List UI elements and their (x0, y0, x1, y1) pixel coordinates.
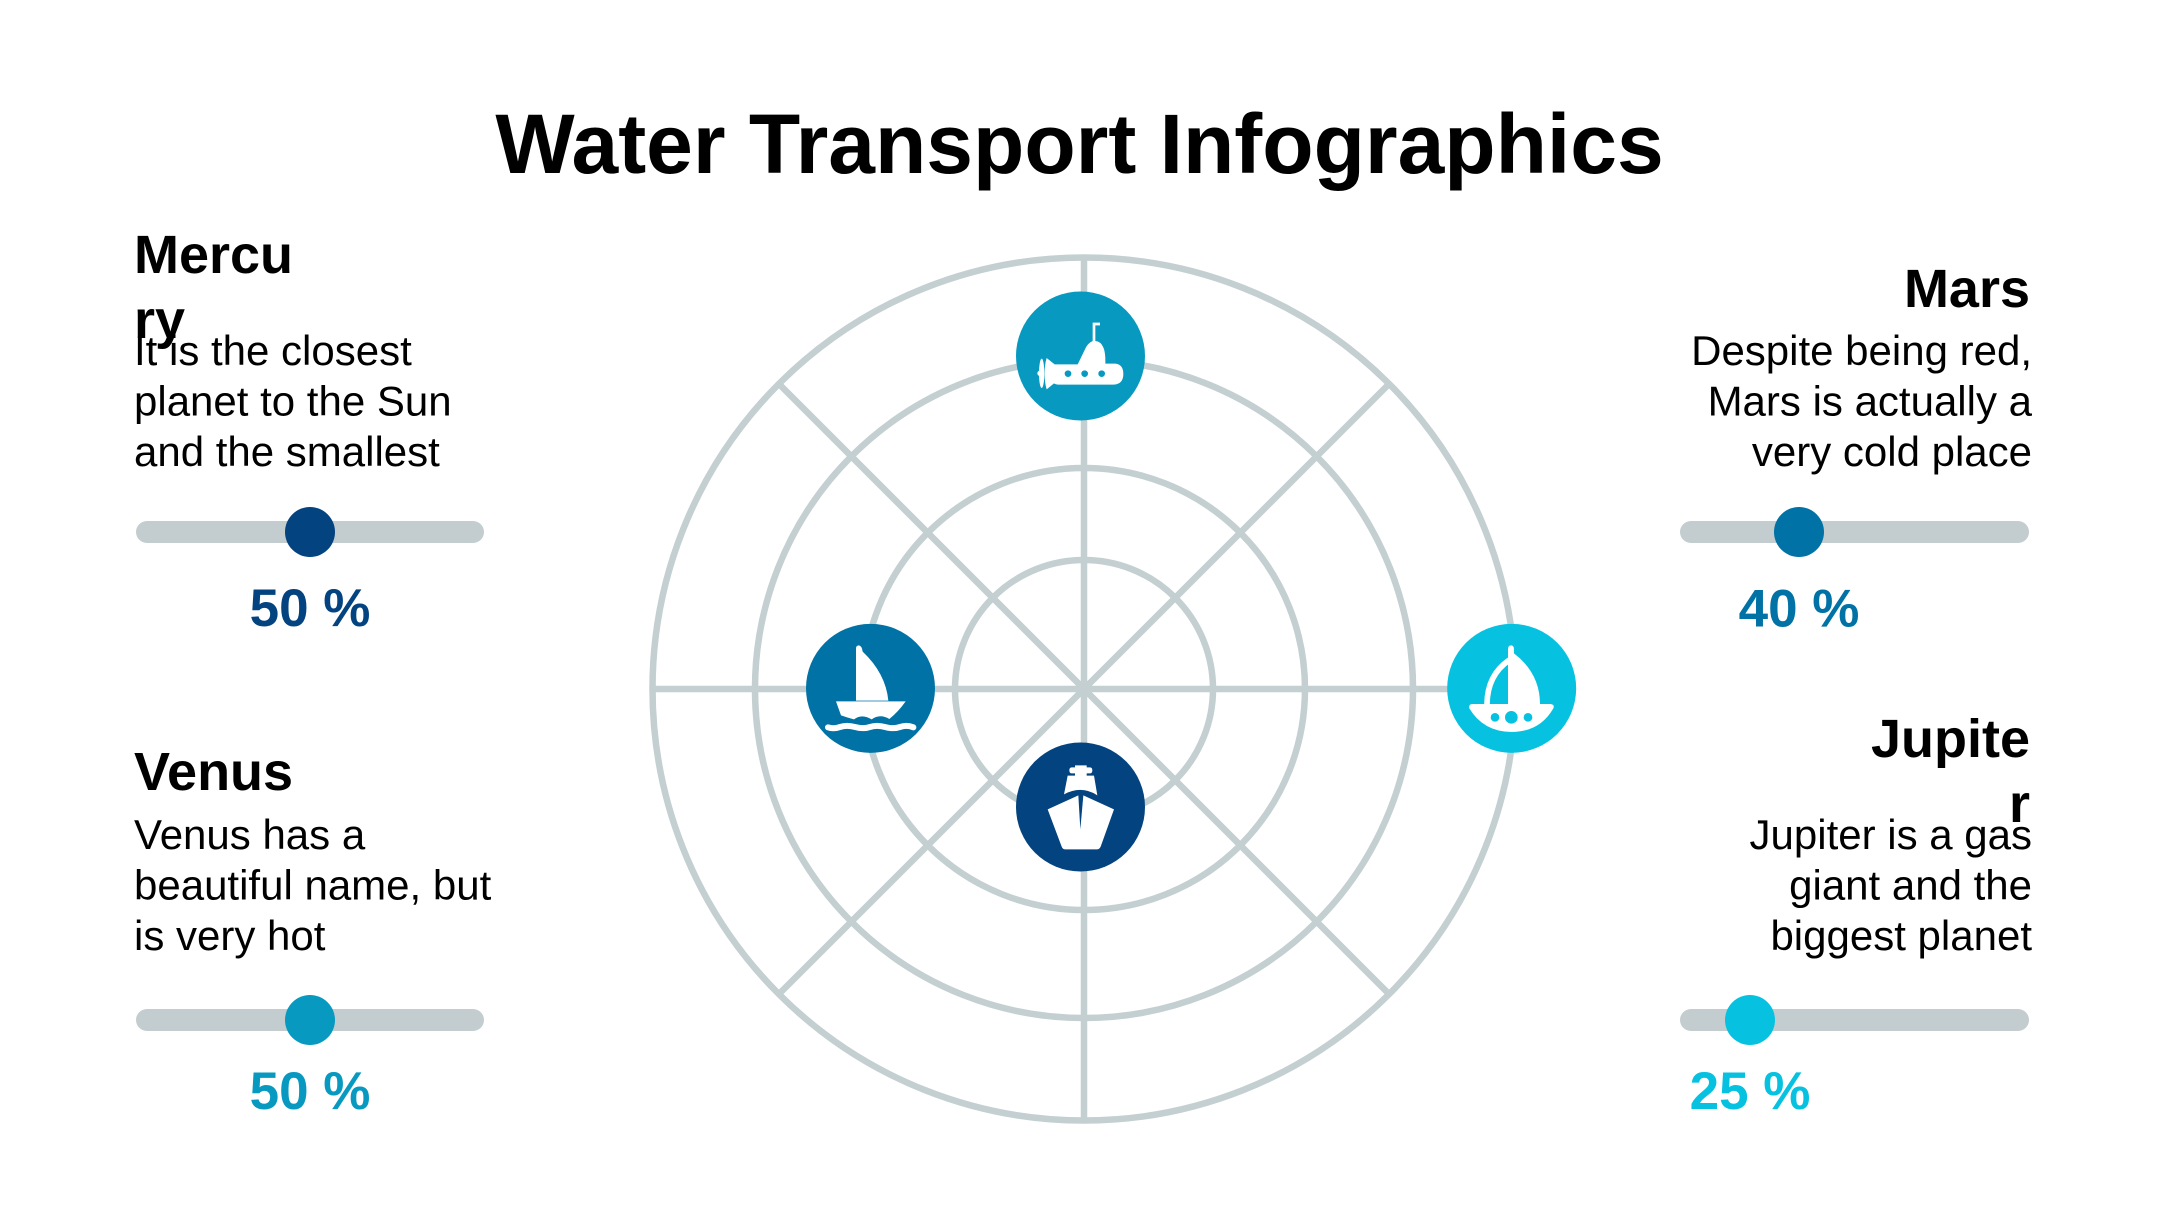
title: Water Transport Infographics (495, 97, 1664, 191)
description: It is the closest (134, 327, 412, 374)
description: planet to the Sun (134, 378, 452, 424)
panel: Jupiter (1680, 709, 2032, 1121)
icon: submarine (1016, 291, 1145, 420)
description: Venus has a (134, 811, 366, 858)
description: and the smallest (134, 428, 440, 475)
slider (1680, 507, 2029, 557)
description: biggest planet (1770, 912, 2032, 959)
description: Jupiter is a gas (1750, 811, 2032, 858)
description: giant and the (1789, 862, 2032, 908)
description: Mars is actually a (1708, 378, 2033, 424)
slider (136, 507, 484, 557)
value: 50 % (250, 579, 370, 638)
heading: ry (134, 290, 185, 350)
slider (136, 995, 484, 1045)
value: 50 % (250, 1062, 370, 1121)
description: Despite being red, (1691, 327, 2032, 374)
icon: sailing boat (806, 624, 935, 753)
value: 40 % (1739, 580, 1859, 638)
heading: Venus (134, 742, 293, 802)
slider (1680, 995, 2029, 1045)
icon: ship (1016, 742, 1145, 871)
description: beautiful name, but (134, 862, 492, 908)
description: is very hot (134, 912, 326, 959)
heading: Mercu (134, 225, 293, 285)
value: 25 % (1690, 1062, 1810, 1121)
heading: Jupite (1871, 709, 2030, 769)
panel: Mars (1680, 259, 2033, 638)
radar grid (652, 258, 1516, 1120)
description: very cold place (1752, 428, 2032, 475)
heading: Mars (1904, 259, 2030, 319)
icon: sailboat with portholes (1447, 624, 1576, 753)
panel: Mercury (134, 225, 484, 638)
heading: r (2009, 774, 2030, 834)
panel: Venus (134, 742, 492, 1121)
